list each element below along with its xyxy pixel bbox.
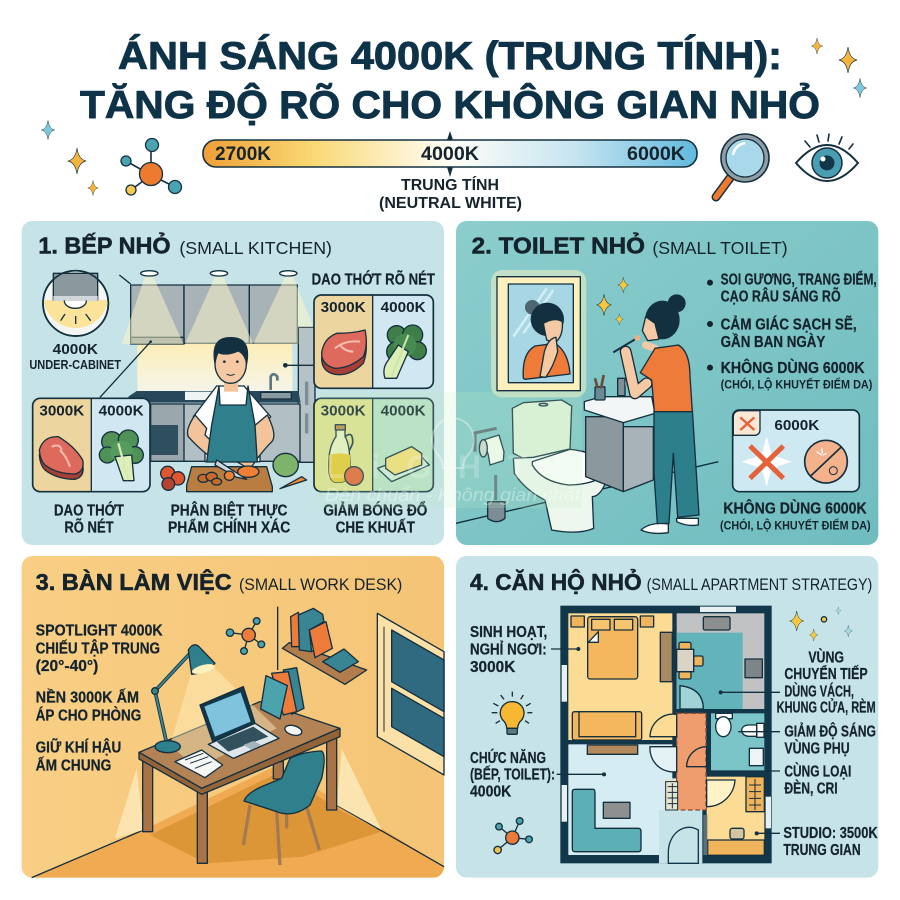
text notes: GIỮ KHÍ HẬU <box>36 739 121 757</box>
bullet list: (CHÓI, LỘ KHUYẾT ĐIỂM DA) <box>721 377 872 392</box>
labels right: DÙNG VÁCH, <box>784 682 854 700</box>
panel: 3 small work desk <box>22 556 444 878</box>
comparison box: meat and greens top <box>314 295 433 388</box>
bullet list: GẦN BAN NGÀY <box>721 334 825 351</box>
icon: eye <box>796 134 858 181</box>
bullet list: CẢM GIÁC SẠCH SẼ, <box>721 316 857 334</box>
heading: apartment: 4. CĂN HỘ NHỎ <box>470 569 642 595</box>
labels right: STUDIO: 3500K <box>783 825 878 842</box>
warning caption <box>720 500 871 533</box>
window <box>377 613 444 775</box>
labels left: (BẾP, TOILET): <box>470 767 555 784</box>
caption: dao thớt: DAO THỚT <box>54 501 125 519</box>
watermark: Đèn chuẩn - Không gian chất <box>325 485 581 505</box>
warning box: 6000K: 6000K <box>774 418 820 434</box>
labels left: NGHỈ NGƠI: <box>470 641 547 658</box>
kitchen scene <box>100 271 315 462</box>
warning caption: (CHÓI, LỘ KHUYẾT ĐIỂM DA) <box>720 518 871 533</box>
colour temperature scale: 6000K <box>627 144 685 165</box>
laptop <box>200 687 279 758</box>
chair <box>243 751 324 865</box>
icon: light bulb <box>492 692 532 734</box>
heading: desk <box>36 569 402 595</box>
text notes: ẤM CHUNG <box>36 757 111 774</box>
caption: phân biệt thực phẩm: PHẨM CHÍNH XÁC <box>168 518 290 536</box>
mouse and papers <box>175 724 303 778</box>
colour temperature scale: TRUNG TÍNH <box>401 175 499 194</box>
comparison box: oil and butter: 4000K <box>381 403 426 419</box>
icon: magnifier <box>716 134 769 197</box>
sparkles <box>597 277 629 325</box>
labels right: CÙNG LOẠI <box>784 763 851 781</box>
watermark: LiGHTS <box>325 449 575 485</box>
caption: dao thớt: RÕ NÉT <box>64 518 114 536</box>
comparison box: meat and greens top: 3000K <box>321 300 366 316</box>
floor <box>32 748 444 878</box>
cutting board and vegetables <box>161 453 307 492</box>
bedroom furniture <box>571 616 672 740</box>
text notes <box>36 623 163 774</box>
colour temperature scale: 2700K <box>215 144 271 165</box>
labels right: GIẢM ĐỘ SÁNG <box>784 722 876 740</box>
bullet list: CẠO RÂU SÁNG RÕ <box>721 288 841 306</box>
panel: 4 small apartment <box>456 556 878 878</box>
text notes: ÁP CHO PHÒNG <box>36 706 141 724</box>
toilet roll and brush <box>473 428 505 522</box>
title <box>80 34 820 127</box>
labels right: VÙNG <box>808 648 844 666</box>
bullet list: KHÔNG DÙNG 6000K <box>721 359 865 377</box>
leader lines <box>551 647 780 835</box>
caption: giảm bóng đổ: CHE KHUẤT <box>336 519 416 536</box>
text notes: (20°-40°) <box>36 658 98 675</box>
books on desk <box>261 668 304 719</box>
labels right <box>777 648 878 859</box>
desk <box>139 702 340 863</box>
labels right: ĐÈN, CRI <box>784 781 838 798</box>
warning box: 6000K <box>733 410 859 492</box>
bathroom fixtures <box>650 713 764 772</box>
heading: toilet <box>472 233 788 259</box>
sink cabinet <box>584 375 655 492</box>
labels right: VÙNG PHỤ <box>784 739 850 757</box>
title: TĂNG ĐỘ RÕ CHO KHÔNG GIAN NHỎ <box>80 82 820 127</box>
title: ÁNH SÁNG 4000K (TRUNG TÍNH): <box>118 34 782 78</box>
labels left: SINH HOẠT, <box>470 624 547 641</box>
sparkles right <box>811 38 867 98</box>
caption: phân biệt thực phẩm: PHÂN BIỆT THỰC <box>171 501 287 519</box>
text notes: SPOTLIGHT 4000K <box>36 623 163 640</box>
colour temperature scale: 4000K <box>421 144 479 165</box>
comparison box: meat and greens top: 4000K <box>381 300 426 316</box>
molecule <box>226 618 265 654</box>
woman applying makeup <box>613 294 699 533</box>
heading: kitchen <box>38 233 332 259</box>
warning caption: KHÔNG DÙNG 6000K <box>723 500 867 518</box>
text notes: CHIẾU TẬP TRUNG <box>36 639 160 657</box>
heading: toilet: 2. TOILET NHỎ <box>472 233 645 259</box>
wall shelf with books <box>282 608 367 684</box>
labels left: 3000K <box>470 659 515 676</box>
comparison box: oil and butter <box>314 398 433 492</box>
kitchen furniture <box>677 617 762 709</box>
heading: kitchen: (SMALL KITCHEN) <box>179 238 332 258</box>
caption: giảm bóng đổ: GIẢM BÓNG ĐỔ <box>323 501 427 519</box>
panel: 2 small toilet <box>456 221 878 545</box>
icon: under-cabinet light: 4000K <box>53 342 98 358</box>
heading: toilet: (SMALL TOILET) <box>652 238 788 258</box>
bullet list <box>707 270 877 392</box>
heading: desk: (SMALL WORK DESK) <box>239 575 402 594</box>
watermark <box>318 392 582 508</box>
desk lamp with light <box>152 645 277 768</box>
labels right: TRUNG GIAN <box>783 842 861 859</box>
comparison box: meat and greens left: 3000K <box>39 403 85 419</box>
comparison box: oil and butter: 3000K <box>321 403 366 419</box>
living room furniture <box>572 745 678 852</box>
colour temperature scale <box>203 131 697 212</box>
colour temperature scale: (NEUTRAL WHITE) <box>379 195 522 212</box>
heading: apartment <box>470 569 872 595</box>
labels left: CHỨC NĂNG <box>470 749 546 767</box>
text notes: NỀN 3000K ẤM <box>36 690 139 707</box>
floor plan <box>560 606 772 863</box>
labels left <box>470 624 555 800</box>
sparkles and molecule left <box>41 120 181 196</box>
panel: 1 small kitchen <box>22 221 444 545</box>
labels left: 4000K <box>470 783 511 800</box>
comparison box: meat and greens left <box>33 398 150 492</box>
caption: dao thớt <box>54 501 125 536</box>
studio furniture <box>703 777 764 855</box>
icon: under-cabinet light: UNDER-CABINET <box>29 358 121 372</box>
label: dao thớt top: DAO THỚT RÕ NÉT <box>312 270 436 288</box>
person chopping <box>187 337 274 469</box>
heading: desk: 3. BÀN LÀM VIỆC <box>36 569 232 595</box>
comparison box: meat and greens left: 4000K <box>99 403 144 419</box>
heading: kitchen: 1. BẾP NHỎ <box>38 233 171 259</box>
toilet <box>512 400 609 532</box>
caption: giảm bóng đổ <box>323 501 427 536</box>
labels right: CHUYỂN TIẾP <box>784 665 868 683</box>
molecule <box>494 818 532 854</box>
caption: phân biệt thực phẩm <box>168 501 290 536</box>
mirror with reflection <box>491 270 586 397</box>
icon: under-cabinet light <box>29 271 121 372</box>
sparkles <box>790 607 852 641</box>
